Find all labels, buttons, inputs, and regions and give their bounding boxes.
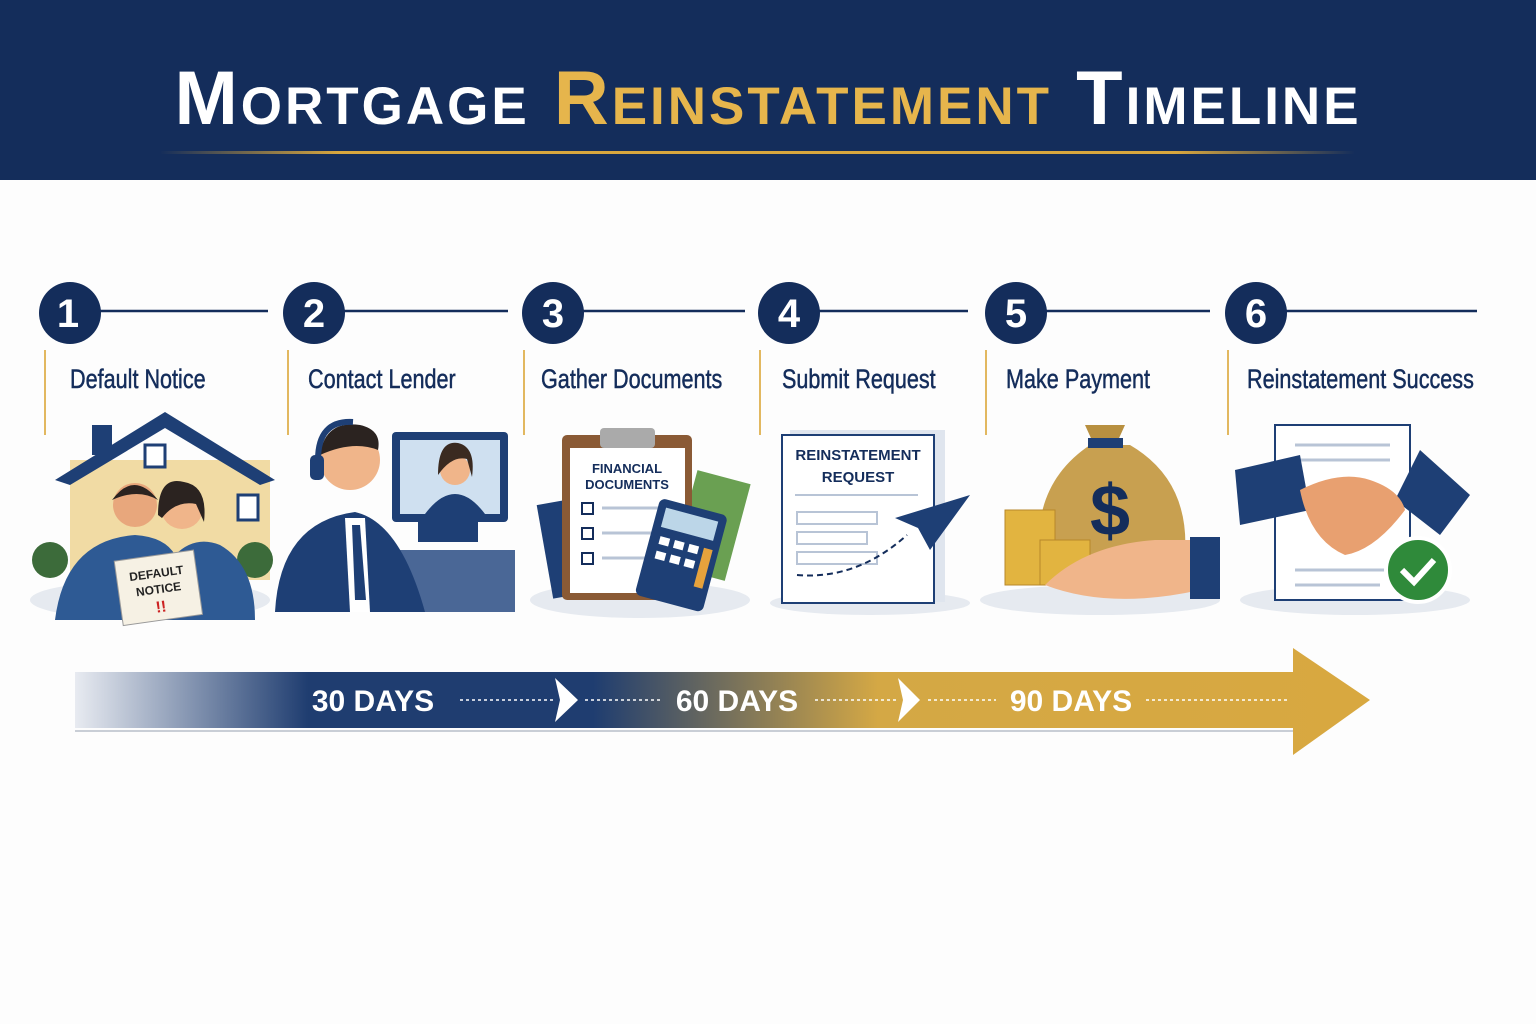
- title: Mortgage Reinstatement Timeline: [174, 56, 1362, 141]
- step markers: 6: [1245, 292, 1267, 336]
- text: Reinstatement Success: [1247, 364, 1474, 394]
- timeline arrow: 90 DAYS: [1010, 685, 1132, 718]
- icon: financial documents: [530, 428, 751, 618]
- timeline arrow: [75, 648, 1370, 755]
- icon: reinstatement request: [770, 430, 970, 615]
- icon: lender call: [275, 422, 515, 612]
- step markers: 5: [1005, 292, 1027, 336]
- illustrations: [30, 412, 1470, 626]
- step markers: 3: [542, 292, 564, 336]
- icon: house couple: DEFAULT: [128, 563, 185, 584]
- step labels: Default Notice: [70, 364, 206, 394]
- text: Make Payment: [1006, 364, 1150, 394]
- step markers: 4: [778, 292, 801, 336]
- icon: handshake success: [1235, 425, 1470, 615]
- icon: reinstatement request: REINSTATEMENT: [795, 447, 921, 464]
- icon: reinstatement request: REQUEST: [822, 469, 894, 486]
- step markers: [39, 282, 1477, 435]
- text: Submit Request: [782, 364, 936, 394]
- header band: [0, 0, 1536, 180]
- icon: house couple: NOTICE: [135, 579, 182, 599]
- icon: money bag payment: [980, 425, 1220, 615]
- text: Gather Documents: [541, 364, 722, 394]
- icon: financial documents: DOCUMENTS: [585, 477, 669, 492]
- step markers: 2: [303, 292, 325, 336]
- step markers: 1: [57, 292, 79, 336]
- icon: financial documents: FINANCIAL: [592, 461, 662, 476]
- timeline arrow: 60 DAYS: [676, 685, 798, 718]
- icon: house couple: [30, 412, 275, 626]
- timeline arrow: 30 DAYS: [312, 685, 434, 718]
- text: Contact Lender: [308, 364, 456, 394]
- icon: money bag payment: $: [1090, 471, 1130, 551]
- icon: house couple: !!: [155, 598, 168, 617]
